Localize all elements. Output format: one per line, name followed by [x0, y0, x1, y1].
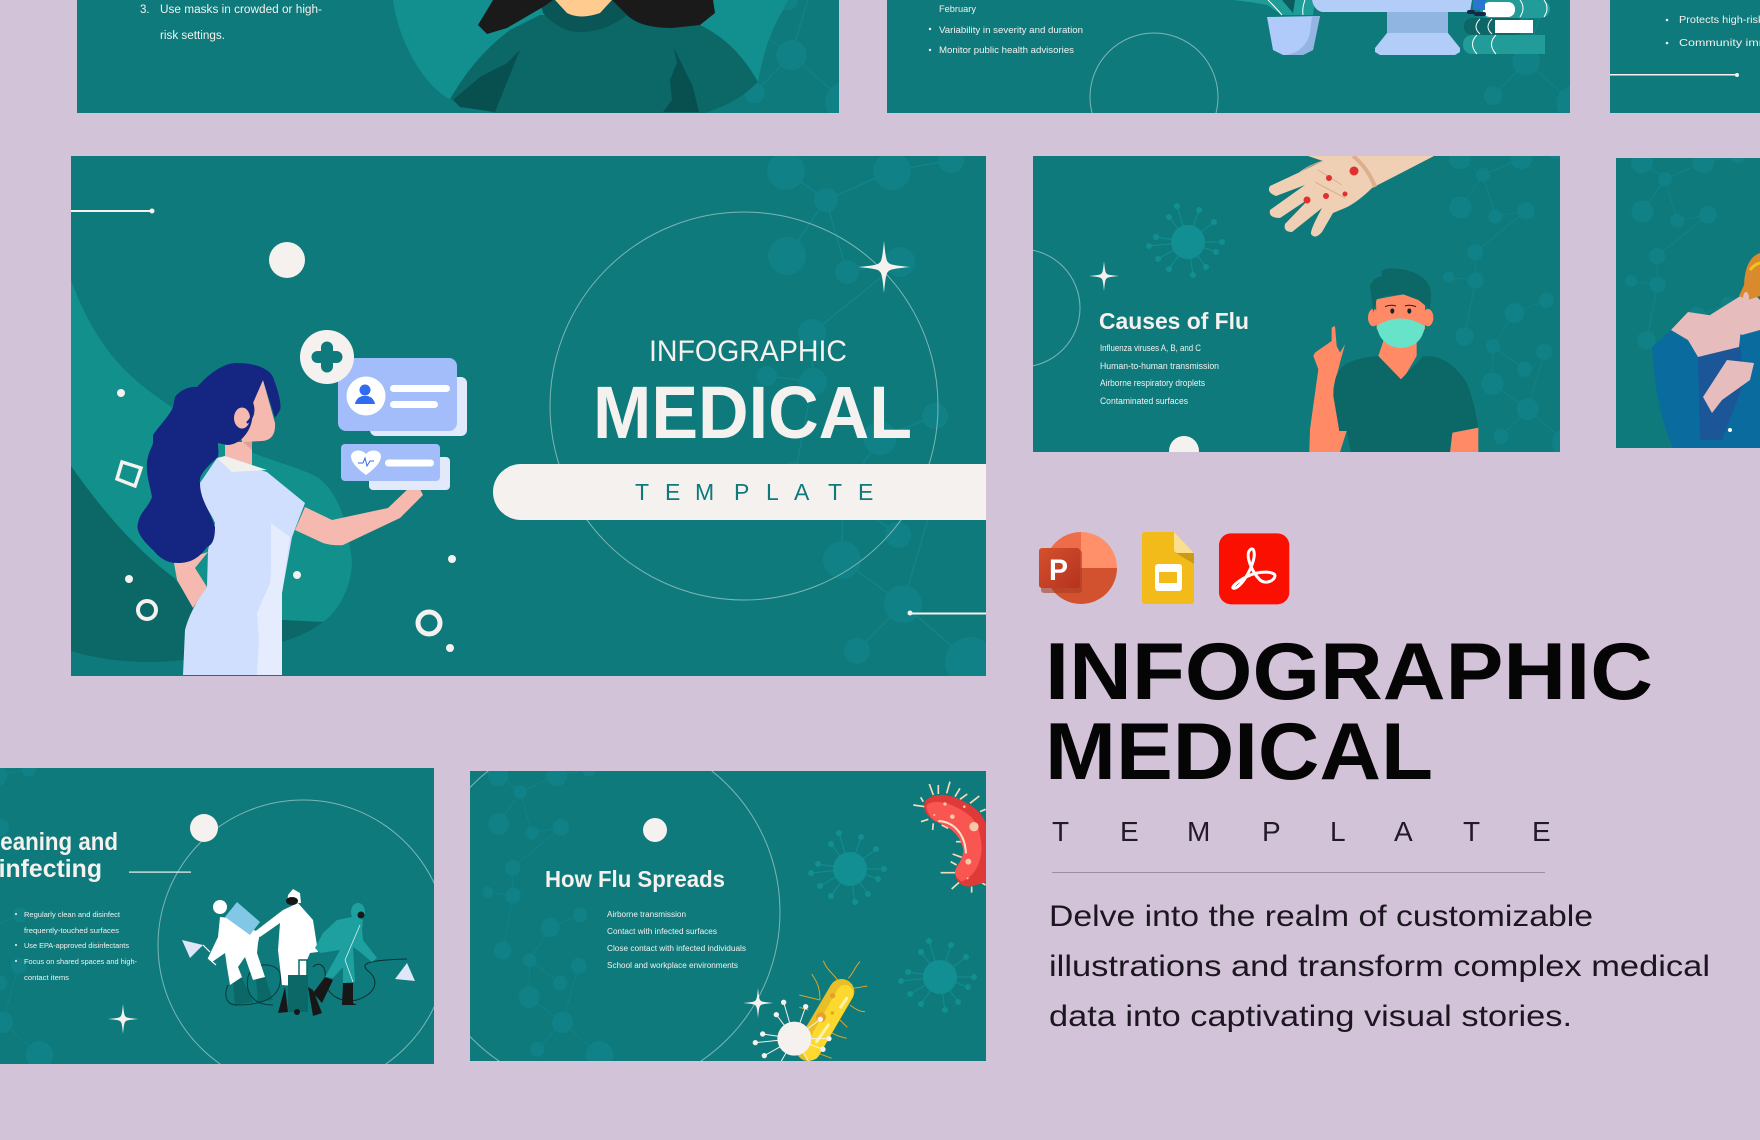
list: causes — [1100, 343, 1219, 406]
heading: INFOGRAPHIC: INFOGRAPHIC — [1045, 627, 1653, 717]
arc — [1033, 250, 1080, 366]
text: slide list fragment — [140, 4, 322, 42]
panel: coughing woman slide — [1616, 148, 1760, 461]
text: slide list fragment: risk settings. — [160, 30, 225, 42]
decorative circle — [190, 814, 218, 842]
list: causes: Contaminated surfaces — [1100, 396, 1188, 406]
decorative circle — [643, 818, 667, 842]
star — [858, 241, 910, 293]
text: slide list fragment: Use masks in crowded or high- — [160, 4, 322, 16]
list: disinfecting tips — [15, 910, 137, 982]
list: causes: Airborne respiratory droplets — [1100, 378, 1205, 388]
star — [108, 1004, 138, 1034]
illustration: hand with spots — [1269, 156, 1434, 237]
text: slide bullet fragment — [929, 4, 1083, 56]
icon: PowerPoint — [1039, 532, 1117, 604]
panel: main title slide — [71, 147, 1033, 687]
text: slide bullet fragment: February — [939, 4, 976, 15]
icon: Adobe PDF — [1219, 533, 1289, 604]
heading: Causes of Flu — [1099, 308, 1249, 334]
accent line top — [71, 210, 152, 212]
list: disinfecting tips: Use EPA-approved disinfectants — [24, 941, 129, 950]
list: disinfecting tips: Regularly clean and disinfect — [24, 910, 121, 919]
outline circle — [158, 800, 434, 1064]
description: data into captivating visual stories. — [1049, 1000, 1572, 1033]
light blob — [393, 0, 788, 99]
virus — [1146, 204, 1224, 278]
divider — [1052, 872, 1545, 873]
virus — [898, 938, 976, 1012]
star — [743, 988, 773, 1018]
icon: Google Slides — [1142, 532, 1194, 604]
accent line right — [910, 612, 986, 614]
description: illustrations and transform complex medical — [1049, 950, 1710, 983]
panel: top-middle slide fragment — [887, 0, 1570, 113]
title text: INFOGRAPHIC: INFOGRAPHIC — [649, 335, 847, 368]
list: disinfecting tips: Focus on shared spaces and high- — [24, 957, 137, 966]
decorative dots and rings — [117, 389, 456, 652]
list: causes: Influenza viruses A, B, and C — [1100, 343, 1201, 353]
title text: MEDICAL: MEDICAL — [593, 371, 912, 454]
icon: desk plant — [1233, 0, 1320, 55]
panel: causes of flu slide — [1033, 156, 1560, 452]
illustration: hazmat workers — [182, 889, 415, 1016]
text: slide bullet fragment — [1666, 15, 1760, 49]
text: slide bullet fragment: Variability in severity and duration — [939, 25, 1083, 36]
outline circle — [420, 732, 780, 1092]
decorative circle — [269, 242, 305, 278]
illustration: white virus — [753, 1000, 832, 1063]
panel: top-right slide fragment — [1610, 0, 1760, 113]
heading: MEDICAL: MEDICAL — [1045, 707, 1433, 797]
text: slide list fragment: 3. — [140, 4, 150, 16]
icon: monitor — [1312, 0, 1472, 55]
illustration: coughing woman — [1652, 253, 1760, 448]
panel: top-left slide fragment — [77, 0, 839, 113]
list: transmission routes: Close contact with infected individuals — [607, 944, 746, 953]
illustration: medical cards — [300, 330, 467, 490]
list: transmission routes: School and workplace environments — [607, 961, 738, 970]
list: disinfecting tips: frequently-touched surfaces — [24, 926, 119, 935]
panel: how flu spreads slide — [420, 732, 988, 1092]
list: causes: Human-to-human transmission — [1100, 361, 1219, 371]
icon: books — [1463, 0, 1550, 54]
illustration: red bacterium — [913, 782, 988, 893]
description: Delve into the realm of customizable — [1049, 900, 1593, 933]
light wave blob — [71, 280, 352, 622]
text: slide bullet fragment: Monitor public health advisories — [939, 45, 1074, 56]
dark wave blob — [71, 466, 323, 662]
outline circle — [550, 212, 938, 600]
illustration: woman in sweater — [450, 0, 758, 113]
list: transmission routes: Contact with infected surfaces — [607, 927, 717, 936]
illustration: yellow bacterium — [799, 961, 867, 1058]
illustration: man with mask — [1309, 268, 1478, 452]
description — [1049, 900, 1710, 1033]
icon: PowerPoint: P — [1049, 554, 1068, 587]
illustration: doctor — [138, 363, 425, 675]
star — [1089, 261, 1119, 291]
text: slide bullet fragment: Community immun — [1679, 38, 1760, 49]
pill banner — [493, 464, 1033, 520]
decorative circle — [1169, 436, 1199, 452]
virus — [808, 830, 886, 904]
panel: cleaning and disinfecting slide — [0, 768, 434, 1064]
heading: How Flu Spreads — [545, 866, 725, 892]
list: transmission routes: Airborne transmission — [607, 910, 686, 919]
pill text: TEMPLATE: TEMPLATE — [635, 479, 873, 505]
accent line — [129, 872, 191, 873]
list: disinfecting tips: contact items — [24, 973, 69, 982]
heading — [0, 828, 118, 883]
list: transmission routes — [607, 910, 746, 970]
subheading: TEMPLATE: TEMPLATE — [1052, 816, 1551, 847]
